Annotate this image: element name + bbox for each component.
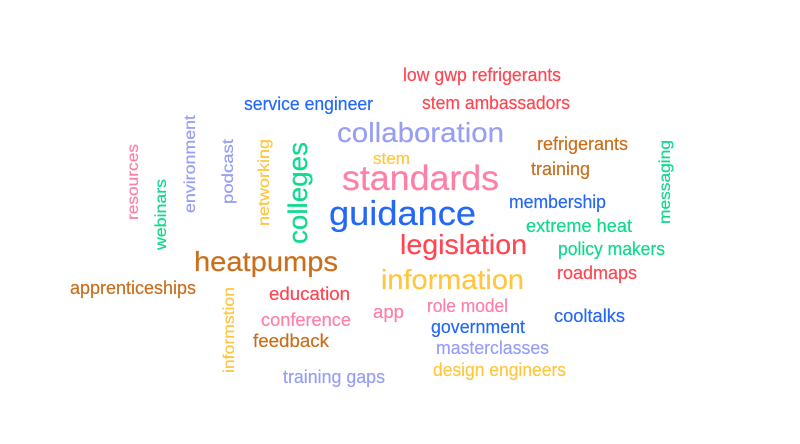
word: extreme heat: extreme heat <box>526 216 632 236</box>
word: role model: role model <box>427 296 508 316</box>
word: masterclasses: masterclasses <box>436 338 549 358</box>
word: cooltalks: cooltalks <box>554 306 625 326</box>
word: education: education <box>269 284 350 304</box>
word: low gwp refrigerants: low gwp refrigerants <box>403 65 561 85</box>
word: heatpumps: heatpumps <box>194 246 338 277</box>
word: feedback: feedback <box>253 331 330 351</box>
word: policy makers: policy makers <box>558 239 665 259</box>
word: service engineer: service engineer <box>244 94 373 114</box>
word: stem ambassadors: stem ambassadors <box>422 93 570 113</box>
word: informstion (vertical): informstion <box>221 287 238 373</box>
word: information: information <box>381 264 524 295</box>
word: environment (vertical): environment <box>182 114 199 213</box>
word: training gaps: training gaps <box>283 367 385 387</box>
word: webinars (vertical): webinars <box>153 179 170 251</box>
word: collaboration: collaboration <box>337 117 504 148</box>
word: design engineers: design engineers <box>433 360 566 380</box>
word: networking (vertical): networking <box>256 139 273 226</box>
word: legislation: legislation <box>400 229 527 260</box>
word: stem: stem <box>373 149 410 168</box>
word: app: app <box>373 302 404 322</box>
word: resources (vertical): resources <box>125 144 142 220</box>
word: guidance: guidance <box>329 195 476 233</box>
word: messaging (vertical): messaging <box>657 140 674 224</box>
word: standards: standards <box>342 159 499 198</box>
word: podcast (vertical): podcast <box>220 138 237 204</box>
word: training: training <box>531 159 590 179</box>
word: membership: membership <box>509 192 606 212</box>
word: roadmaps: roadmaps <box>557 263 637 283</box>
word: government: government <box>431 317 525 337</box>
word: apprenticeships: apprenticeships <box>70 278 196 298</box>
word: refrigerants: refrigerants <box>537 134 628 154</box>
word: conference: conference <box>261 310 351 330</box>
word: colleges (vertical): colleges <box>283 142 313 244</box>
